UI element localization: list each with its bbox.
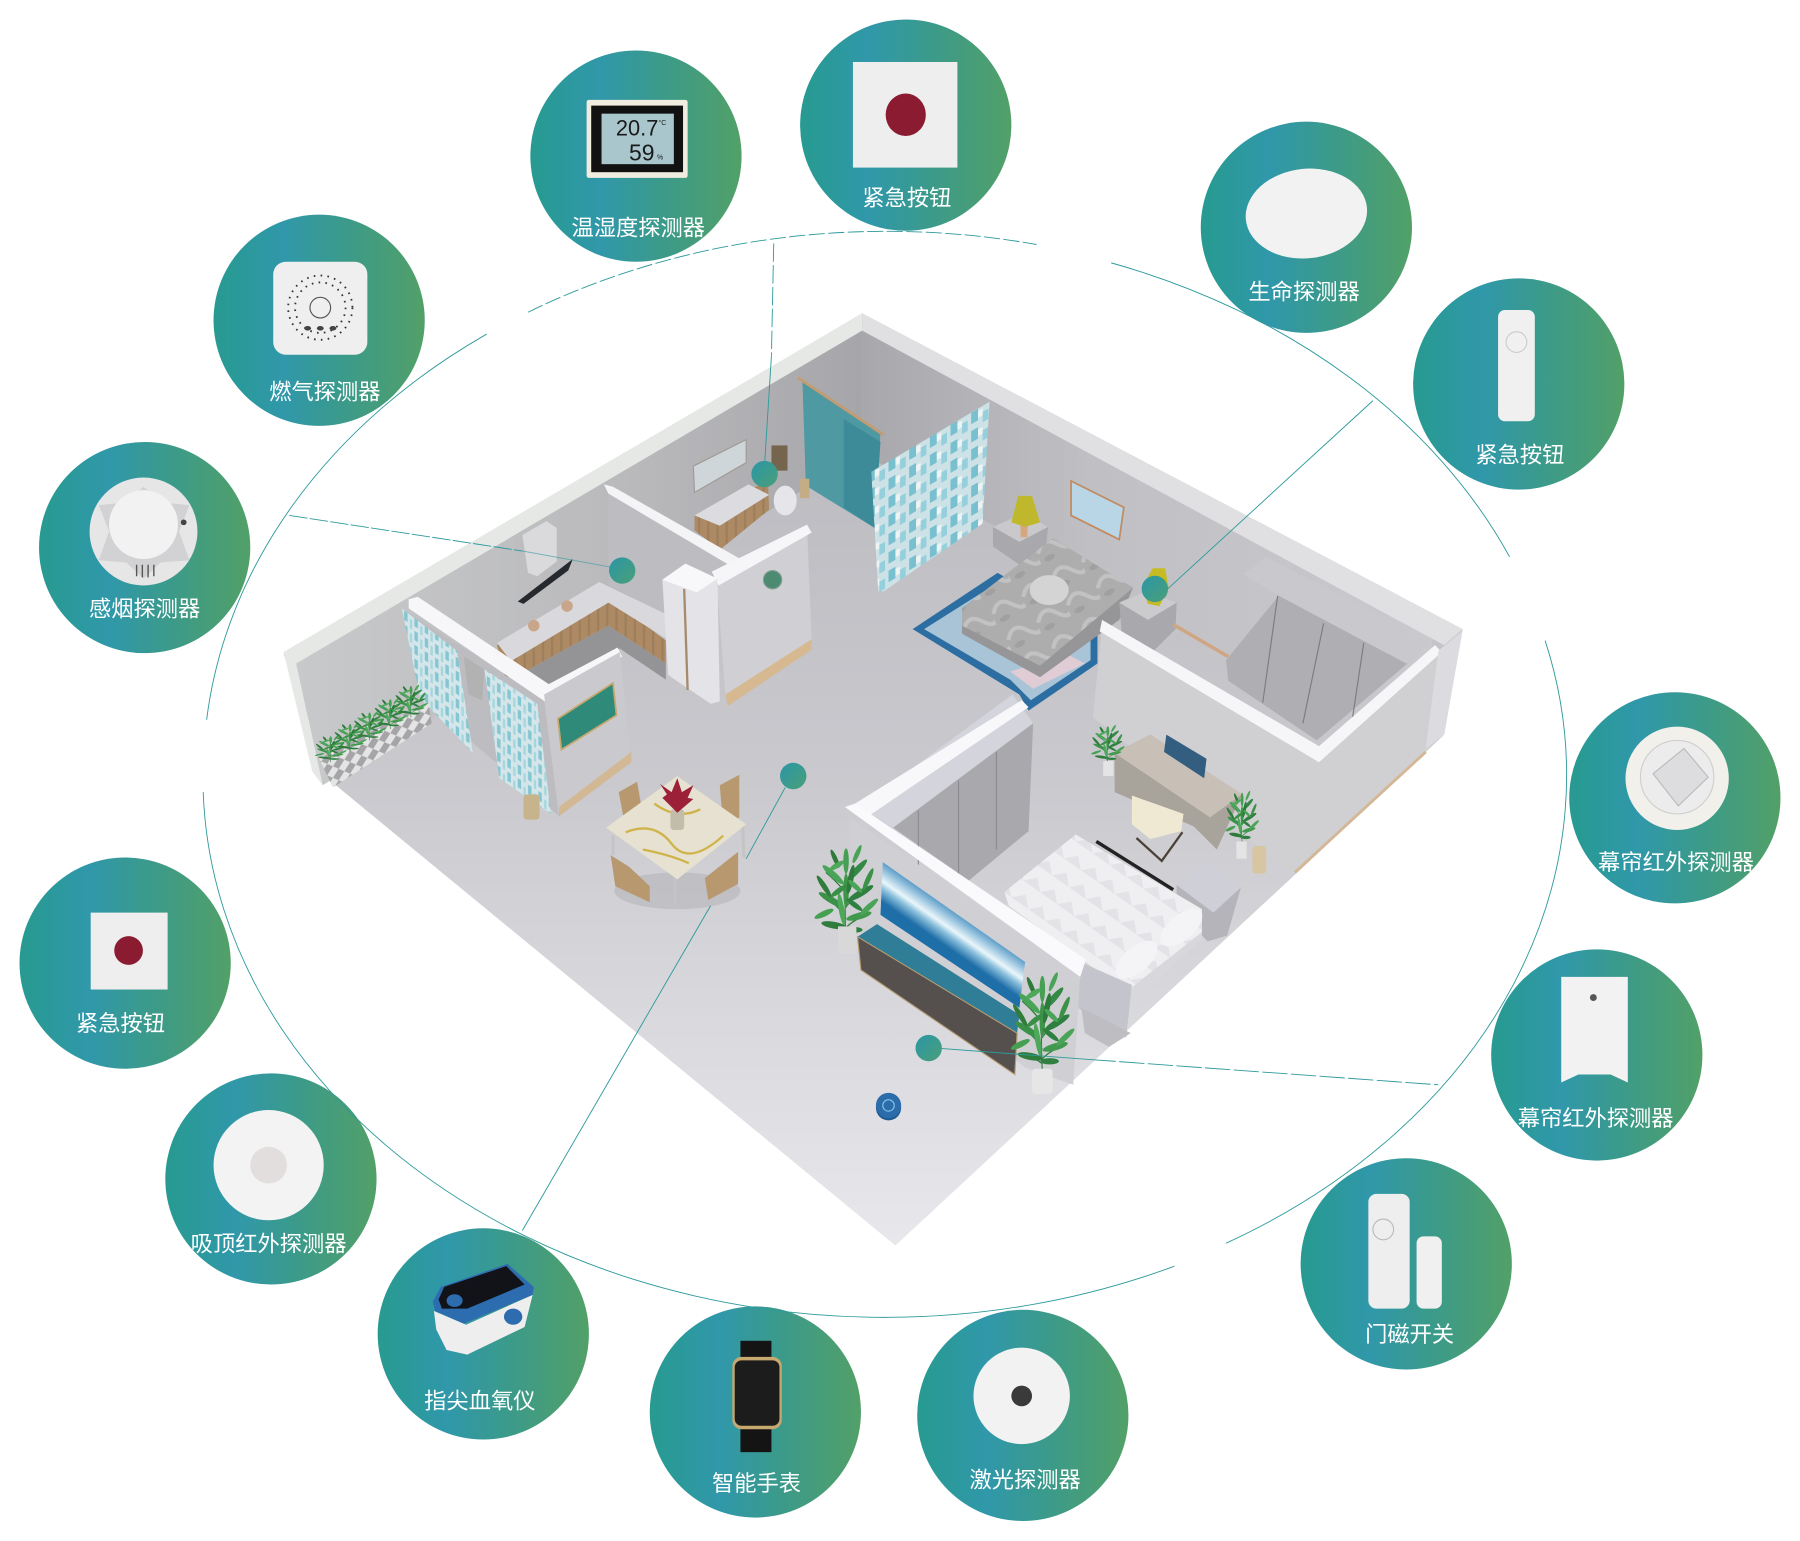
device circle: ceiling infrared detector: [165, 1073, 377, 1285]
device circle: fingertip oximeter: [378, 1228, 589, 1440]
label: 紧急按钮: [1475, 443, 1564, 468]
floor plan: isometric apartment: [284, 313, 1462, 1246]
entrance: partition wall with curtains, planter and painting: [314, 597, 631, 820]
icon: laser detector: [973, 1348, 1070, 1444]
icon: emergency button: [853, 62, 957, 168]
floor: [284, 313, 1462, 1246]
device circle: curtain infrared detector (ceiling): [1569, 692, 1780, 903]
living room: TV, TV stand and plants: [814, 844, 1076, 1094]
back walls: [284, 313, 1462, 785]
bedroom two: wardrobe and front wall: [844, 695, 1086, 1085]
device circle: smart watch: [650, 1306, 861, 1518]
label: 温湿度探测器: [571, 215, 705, 240]
device circle: gas detector: [214, 215, 425, 426]
icon: temperature and humidity display: [587, 100, 688, 178]
connector lines: [289, 243, 1438, 1231]
icon: ceiling infrared sensor: [214, 1110, 324, 1220]
label: 紧急按钮: [76, 1011, 165, 1036]
connection ellipse arcs: [203, 231, 1567, 1317]
label: 感烟探测器: [89, 596, 200, 621]
robot vacuum: [876, 1093, 901, 1120]
icon: smart watch: [732, 1341, 782, 1452]
label: 吸顶红外探测器: [191, 1231, 347, 1256]
label: 门磁开关: [1365, 1322, 1454, 1347]
icon: temperature and humidity display: %: [657, 155, 663, 162]
bedroom two: bed and nightstand: [1004, 835, 1241, 1047]
label: 紧急按钮: [862, 185, 951, 210]
device circle: laser detector: [917, 1310, 1128, 1521]
icon: gas detector: [273, 262, 367, 355]
device circle: emergency button (left): [20, 858, 231, 1069]
label: 激光探测器: [969, 1468, 1081, 1493]
device circle: emergency button (top): [800, 20, 1011, 231]
sensor marker dots: [609, 461, 1168, 1061]
device circle: door magnetic switch: [1301, 1158, 1512, 1369]
kitchen: partition, counter and range hood: [497, 484, 740, 691]
icon: ceiling curtain sensor: [1626, 727, 1729, 830]
device circle: smoke detector: [39, 442, 250, 653]
device circle: curtain infrared detector (wall): [1491, 949, 1702, 1161]
label: 燃气探测器: [269, 379, 381, 404]
device circle: temperature and humidity detector: [530, 51, 742, 262]
study: desk, monitor, chair and plants: [1091, 724, 1266, 874]
label: 生命探测器: [1248, 280, 1360, 305]
icon: temperature and humidity display: 20.7: [616, 115, 658, 140]
bathroom: shower glass, vanity and mirror: [693, 378, 884, 550]
icon: life detector: [1241, 163, 1372, 264]
label: 幕帘红外探测器: [1518, 1106, 1674, 1131]
label: 幕帘红外探测器: [1598, 850, 1754, 875]
label: 智能手表: [712, 1471, 801, 1496]
icon: temperature and humidity display: 59: [629, 140, 654, 166]
curtain between bathroom and bedroom: [871, 402, 990, 591]
device circle: emergency button (slim): [1413, 278, 1624, 490]
label: 指尖血氧仪: [424, 1389, 536, 1414]
partition wall and refrigerator: [662, 525, 812, 706]
icon: wall curtain sensor: [1561, 977, 1628, 1083]
device circle: life detector: [1201, 122, 1412, 333]
icon: door contact: [1368, 1194, 1442, 1309]
dining table with chairs and flower: [606, 775, 746, 909]
icon: temperature and humidity display: °C: [659, 119, 666, 127]
bedroom partition wall: [1093, 620, 1462, 875]
icon: emergency button: [91, 913, 168, 990]
bedroom one: rug, bed, nightstands, lamps and painting: [913, 481, 1177, 711]
icon: smoke detector: [90, 478, 197, 585]
wardrobe in bedroom one: [1173, 557, 1430, 740]
icon: fingertip oximeter: [433, 1264, 534, 1355]
icon: slim emergency button: [1498, 310, 1535, 421]
